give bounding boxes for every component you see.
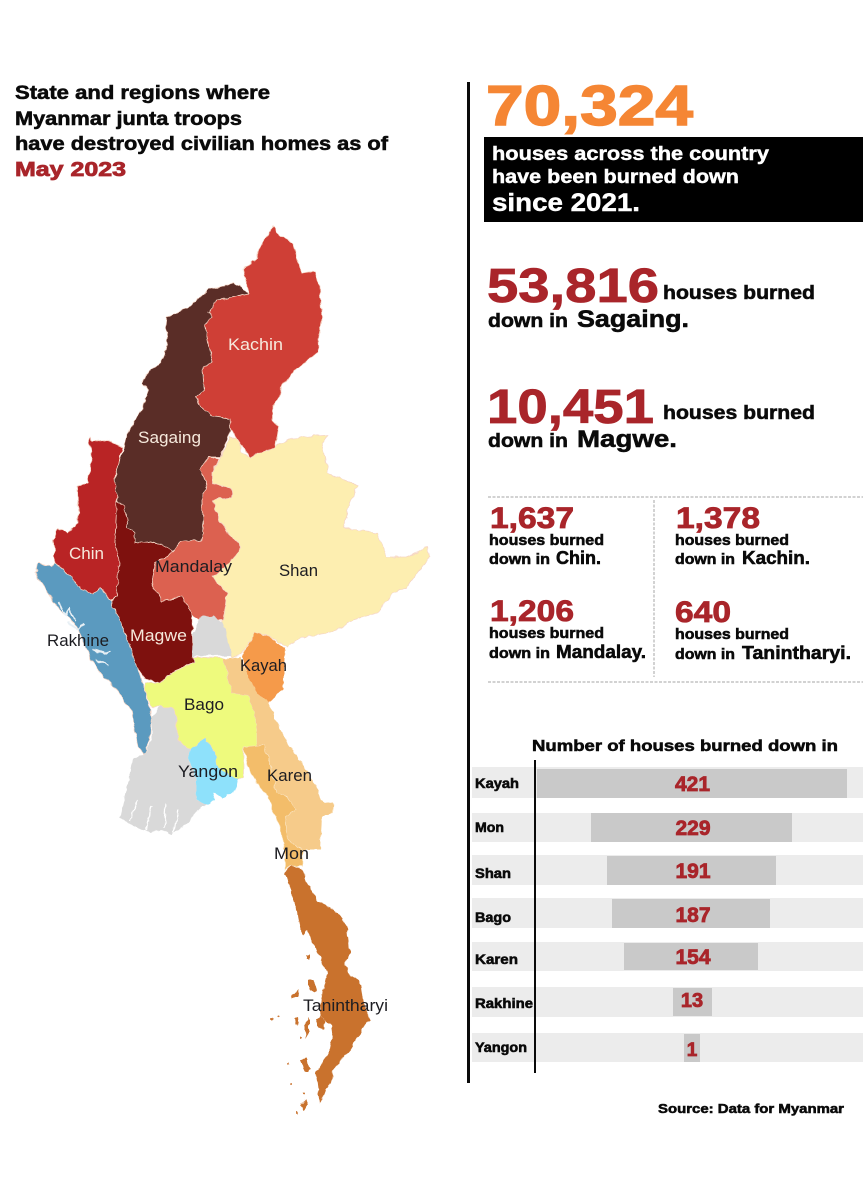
row: Yangon: Yangon [475, 1040, 527, 1055]
row: Rakhine [472, 987, 863, 1017]
row: Bago [472, 898, 863, 928]
stat: Sagaing: 53,816 [487, 260, 659, 313]
title [15, 83, 389, 181]
row: Kayah: 421 [675, 773, 710, 796]
region: Kayah [242, 633, 285, 702]
region: Mon [243, 745, 303, 870]
chart axis [534, 760, 536, 1073]
black callout [484, 137, 863, 222]
row: Shan [472, 855, 863, 885]
title: May 2023 [15, 159, 126, 181]
map labels: Karen [267, 767, 312, 785]
row: Karen: Karen [475, 952, 518, 967]
stat: Magwe [487, 381, 815, 453]
row: Kayah [472, 767, 863, 798]
stat: Magwe: houses burned [663, 403, 815, 424]
region: Yangon [188, 738, 238, 805]
stat: Mandalay: down in [489, 645, 550, 662]
stat: Kachin [675, 502, 810, 568]
row: Mon [472, 813, 863, 842]
region: Mandalay [152, 458, 242, 620]
stat: Chin [489, 502, 604, 568]
chart title: Number of houses burned down in [532, 738, 838, 755]
stat: Magwe: 10,451 [487, 381, 654, 434]
row: Bago: 187 [675, 904, 711, 927]
map labels: Chin [69, 545, 104, 563]
stat: Kachin: houses burned [675, 532, 789, 549]
map labels: Yangon [178, 763, 238, 781]
stat: Mandalay [489, 595, 646, 662]
row: Shan: 191 [675, 860, 711, 883]
stat: Sagaing: Sagaing. [577, 306, 689, 333]
vertical divider [467, 82, 470, 1083]
stat: Magwe: Magwe. [577, 426, 677, 453]
black callout: have been burned down [492, 167, 739, 188]
region: Shan [212, 435, 430, 657]
region: Ayeyarwady [120, 705, 207, 834]
stat: Tanintharyi: down in [675, 646, 735, 663]
stat: Chin: houses burned [489, 532, 604, 549]
map labels [47, 336, 388, 1015]
map labels: Shan [279, 562, 318, 580]
map labels: Kayah [240, 657, 287, 675]
map of Myanmar [35, 227, 430, 1114]
map labels: Sagaing [138, 429, 201, 447]
map labels: Magwe [130, 627, 187, 645]
stat: Mandalay: houses burned [489, 625, 604, 642]
stat: Tanintharyi: houses burned [675, 626, 789, 643]
row: Kayah: Kayah [475, 776, 519, 791]
stat: Tanintharyi [675, 596, 851, 663]
source note: Source: Data for Myanmar [658, 1101, 844, 1116]
row: Yangon [472, 1033, 863, 1062]
row: Rakhine: 13 [681, 990, 703, 1012]
row: Mon: Mon [475, 820, 504, 835]
region: Magwe [110, 500, 195, 683]
region: Rakhine [35, 562, 152, 755]
stat: Chin: down in [489, 551, 550, 568]
row: Yangon: 1 [687, 1040, 698, 1061]
stat: Mandalay: Mandalay. [556, 642, 646, 662]
row: Karen: 154 [675, 946, 711, 969]
black callout: since 2021. [492, 189, 640, 217]
black callout: houses across the country [492, 144, 769, 165]
title: have destroyed civilian homes as of [15, 134, 389, 155]
region: Chin [54, 437, 122, 599]
row: Mon: 229 [675, 817, 711, 840]
map labels: Kachin [228, 336, 283, 354]
stat: Tanintharyi: Tanintharyi. [742, 643, 851, 663]
title: State and regions where [15, 83, 270, 104]
row: Karen [472, 942, 863, 971]
map labels: Mon [274, 845, 309, 863]
bar chart: houses burned by region [472, 738, 863, 1073]
map labels: Rakhine [47, 632, 109, 650]
region: Sagaing [115, 283, 249, 552]
stat: Sagaing: houses burned [663, 283, 815, 304]
region: Bago [145, 657, 257, 780]
stat: Magwe: down in [488, 431, 568, 452]
region: Karen [223, 657, 333, 850]
stat: Kachin: down in [675, 551, 735, 568]
stat: Sagaing: down in [488, 311, 568, 332]
row: Bago: Bago [475, 910, 511, 925]
stat: Kachin: 1,378 [676, 502, 760, 535]
row: Rakhine: Rakhine [475, 996, 534, 1011]
stat: Chin: 1,637 [490, 502, 574, 535]
headline total: 70,324 [486, 74, 693, 138]
stat: Sagaing [487, 260, 815, 333]
row: Shan: Shan [475, 866, 511, 881]
title: Myanmar junta troops [15, 109, 242, 130]
region: Kachin [197, 227, 322, 457]
stat: Tanintharyi: 640 [675, 596, 731, 629]
region: Naypyidaw [192, 615, 232, 656]
map labels: Mandalay [155, 558, 233, 576]
map labels: Bago [184, 696, 224, 714]
stat: Mandalay: 1,206 [490, 595, 574, 628]
map labels: Tanintharyi [303, 997, 388, 1015]
stat: Kachin: Kachin. [742, 548, 810, 568]
map regions [35, 227, 430, 1114]
region: Tanintharyi [271, 865, 370, 1114]
stat: Chin: Chin. [556, 548, 601, 568]
